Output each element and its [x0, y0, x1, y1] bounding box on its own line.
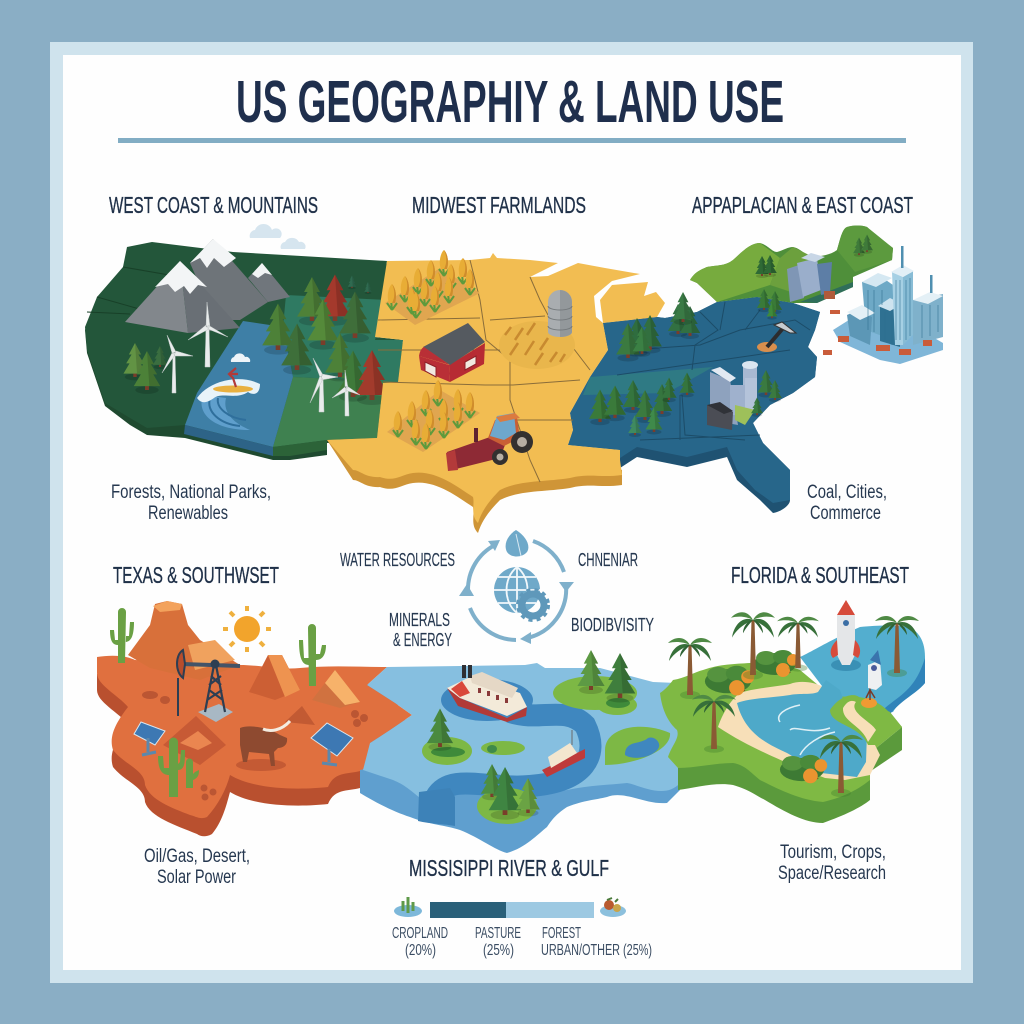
icon: sun: [223, 606, 271, 652]
caption: florida: Space/Research: [778, 863, 886, 884]
cycle arrows: [459, 540, 574, 644]
labels: URBAN/OTHER (25%): [541, 942, 652, 959]
icon: big city east: [823, 246, 943, 364]
heading: midwest: MIDWEST FARMLANDS: [412, 192, 586, 218]
icon: cornfield south: [387, 380, 480, 452]
heading: mississippi: MISSISIPPI RIVER & GULF: [409, 855, 609, 881]
lagoon and beach: [718, 682, 880, 780]
stacked bar: [430, 902, 594, 918]
region: west green: [85, 242, 403, 460]
icon: wind turbines: [162, 302, 360, 416]
label: minerals: & ENERGY: [393, 630, 452, 650]
icon: solar panels: [134, 722, 353, 765]
icon: urban produce: [600, 898, 626, 917]
label: minerals: MINERALS: [389, 610, 450, 630]
label: chneniar: CHNENIAR: [578, 550, 638, 570]
icon: surfer on wave: [197, 353, 260, 430]
labels: CROPLAND: [392, 925, 448, 942]
icon: mini city northeast: [757, 253, 835, 320]
label: biodiversity: BIODIBVISITY: [571, 615, 654, 635]
labels: PASTURE: [475, 925, 521, 942]
caption: texas: [144, 846, 250, 888]
icon: coal pick: [757, 322, 796, 352]
heading: west coast: WEST COAST & MOUNTAINS: [109, 192, 318, 218]
panel: texas and southwest: [97, 601, 412, 836]
icon: mesa rocks: [128, 601, 360, 765]
icon: barn: [419, 323, 485, 382]
region: northeast green: [690, 226, 893, 303]
icon: longhorn bull: [236, 721, 290, 771]
caption: texas: Oil/Gas, Desert,: [144, 846, 250, 867]
panel: US map: [85, 224, 943, 533]
legend: land use: [392, 897, 652, 959]
icon: small rocks: [142, 691, 368, 800]
icon: rockets: [831, 600, 882, 708]
icon: islands with trees: [422, 650, 670, 824]
panel: florida and southeast: [660, 600, 925, 823]
icon: wheat field: [499, 321, 575, 369]
heading: texas: TEXAS & SOUTHWSET: [113, 562, 279, 588]
icon: mountains: [125, 239, 290, 333]
icon: cacti: [110, 608, 326, 797]
heading: florida: FLORIDA & SOUTHEAST: [731, 562, 909, 588]
labels: [392, 925, 652, 959]
region: midwest yellow: [327, 253, 665, 533]
label: water resources: WATER RESOURCES: [340, 550, 455, 570]
labels: (20%): [405, 942, 436, 959]
icon: globe and gear: [494, 567, 548, 620]
caption: florida: [778, 842, 886, 884]
icons: pine trees west: [123, 274, 389, 405]
icon: cornfield north: [385, 250, 480, 325]
labels: (25%): [483, 942, 514, 959]
icon: clouds: [250, 224, 306, 249]
icon: mini city southeast: [707, 361, 782, 430]
icon: oil pumpjack: [177, 650, 240, 722]
caption: west: Renewables: [148, 503, 228, 524]
caption: west: Forests, National Parks,: [111, 482, 271, 503]
caption: west: [111, 482, 271, 524]
caption: texas: Solar Power: [157, 867, 237, 888]
icons: pine trees east: [589, 292, 700, 437]
caption: east: Commerce: [810, 503, 881, 524]
icons: orange bushes: [705, 650, 827, 783]
labels: FOREST: [542, 925, 581, 942]
icon: silo: [548, 290, 572, 337]
caption: east: [807, 482, 887, 524]
icon: tractor: [446, 413, 533, 471]
cycle diagram: [340, 530, 654, 650]
label: minerals: [389, 610, 452, 650]
icon: river boats: [447, 665, 585, 777]
icons: palm trees: [668, 612, 919, 797]
icon: cropland: [394, 897, 422, 917]
panel: mississippi river and gulf: [360, 650, 680, 853]
icon: leaf: [506, 530, 528, 556]
caption: east: Coal, Cities,: [807, 482, 887, 503]
caption: florida: Tourism, Crops,: [780, 842, 886, 863]
region: east blue: [568, 297, 820, 513]
heading: appalachian: APPAPLACIAN & EAST COAST: [692, 192, 913, 218]
